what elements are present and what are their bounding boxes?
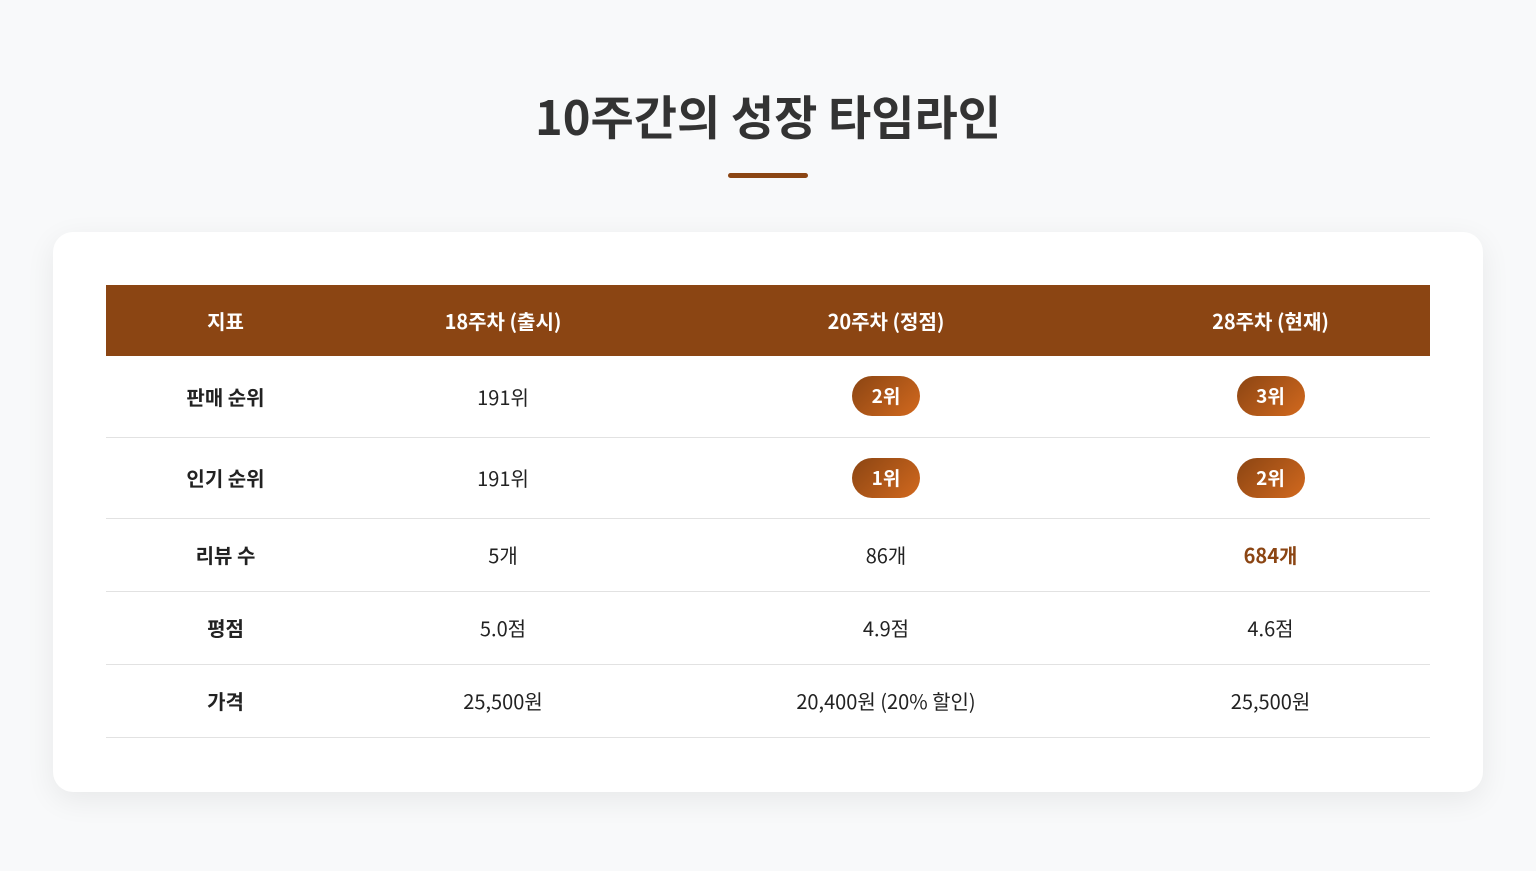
table: growth metrics: 리뷰 수	[196, 540, 255, 569]
table: growth metrics: 1위	[872, 464, 900, 490]
table: growth metrics: 2위	[1256, 464, 1285, 490]
table: growth metrics: 2위	[872, 382, 900, 409]
title underline	[728, 173, 808, 178]
table: growth metrics: 3위	[1256, 382, 1285, 409]
table: growth metrics: 191위	[477, 463, 529, 492]
table: growth metrics: 5.0점	[480, 613, 526, 642]
table: growth metrics: 5개	[488, 540, 518, 569]
table: growth metrics: 18주차 (출시)	[445, 306, 561, 335]
table: growth metrics: 지표	[207, 306, 244, 335]
table: growth metrics	[106, 285, 1430, 738]
table: growth metrics: 판매 순위	[186, 382, 265, 411]
table: growth metrics: 86개	[866, 540, 906, 569]
title: 10주간의 성장 타임라인	[535, 80, 1001, 149]
table: growth metrics: 가격	[207, 686, 244, 715]
table: growth metrics: 684개	[1244, 540, 1297, 569]
table: growth metrics: 25,500원	[463, 686, 543, 715]
table: growth metrics: 평점	[207, 613, 244, 642]
table: growth metrics: 인기 순위	[186, 463, 265, 492]
table: growth metrics: 25,500원	[1231, 686, 1310, 715]
table: growth metrics: 4.9점	[863, 613, 909, 642]
table: growth metrics: 28주차 (현재)	[1212, 306, 1329, 335]
panel: timeline table card	[53, 232, 1483, 792]
table: growth metrics: 20주차 (정점)	[828, 306, 944, 335]
table: growth metrics: 20,400원 (20% 할인)	[796, 686, 976, 715]
table: growth metrics: 191위	[477, 382, 529, 411]
table: growth metrics: 4.6점	[1247, 613, 1294, 642]
